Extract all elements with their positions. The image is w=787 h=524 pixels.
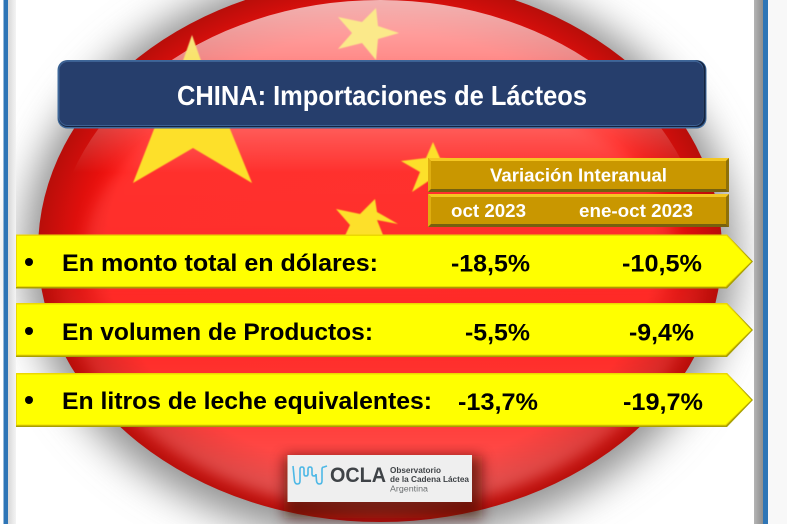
- header: Variación Interanual: Variación Interanual: [490, 164, 667, 186]
- value oct 2023: -13,7%: [458, 389, 538, 416]
- logo caption: Argentina: [390, 484, 429, 494]
- icon: small star top: [338, 8, 399, 60]
- title text: CHINA: Importaciones de Lácteos: [177, 80, 587, 111]
- header: periods: ene-oct 2023: [579, 200, 693, 221]
- value ene-oct 2023: -19,7%: [623, 389, 703, 416]
- wordmark: OCLA: [330, 464, 386, 487]
- icon: wave: [293, 466, 327, 484]
- icon: small star right: [400, 142, 448, 192]
- header: Variación Interanual: [428, 158, 729, 192]
- value ene-oct 2023: -10,5%: [622, 250, 702, 278]
- icon: large star: [132, 34, 252, 184]
- label: En litros de leche equivalentes:: [62, 388, 432, 415]
- icon: small star lower: [336, 198, 398, 234]
- bullet: [25, 396, 33, 404]
- logo caption: Observatorio: [390, 466, 441, 475]
- bullet: [25, 327, 33, 335]
- value oct 2023: -18,5%: [451, 250, 530, 278]
- value ene-oct 2023: -9,4%: [629, 320, 694, 346]
- right frame: [754, 0, 787, 524]
- logo caption: de la Cadena Láctea: [390, 475, 470, 484]
- label: En monto total en dólares:: [62, 250, 378, 277]
- row: volumen de productos: [16, 303, 753, 357]
- row: monto total en dolares: [16, 234, 753, 288]
- value oct 2023: -5,5%: [465, 320, 530, 346]
- left frame: [4, 0, 16, 524]
- title banner: [58, 60, 706, 128]
- label: En volumen de Productos:: [62, 319, 373, 346]
- row: litros de leche equivalentes: [16, 373, 753, 427]
- header: periods: [428, 194, 729, 227]
- header: periods: oct 2023: [451, 200, 526, 221]
- bullet: [25, 258, 33, 266]
- logo: OCLA: [284, 455, 482, 518]
